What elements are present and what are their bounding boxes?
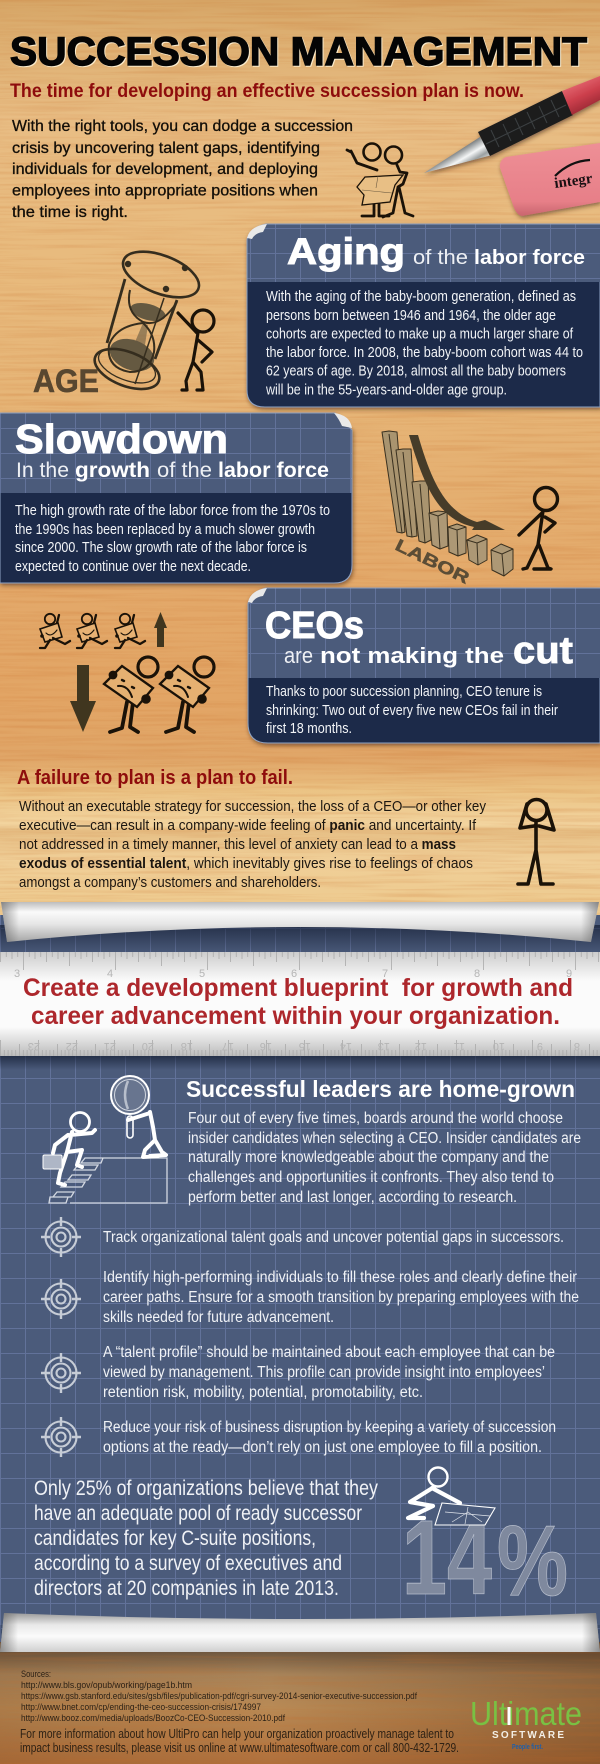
sand <box>105 300 167 377</box>
text block: failure to plan <box>19 799 487 891</box>
intro text: employees into appropriate positions when <box>12 182 318 200</box>
bullet text: talent profile: A “talent profile” should be maintained about each employee that can be <box>103 1344 555 1361</box>
figure with magnifier <box>111 1076 166 1157</box>
text block: failure to plan: exodus of essential talent, which inevitably gives rise to feelings of chaos <box>19 856 473 872</box>
icon: target 3 <box>41 1353 81 1393</box>
footer call to action <box>20 1727 459 1755</box>
ruler with heading <box>0 952 600 1056</box>
stat: 14 percent with figure <box>402 1468 568 1617</box>
heading: slowdown: of the <box>157 458 212 482</box>
body text: aging <box>265 289 583 398</box>
sources: http://www.bls.gov/opub/working/page1b.htm <box>21 1680 192 1691</box>
heading: a failure to plan: A failure to plan is a plan to fail. <box>17 767 293 789</box>
text block: failure to plan: not addressed in a timely manner, this level of anxiety can lead to a mass <box>19 837 456 853</box>
panel: ceos not making the cut <box>248 588 600 743</box>
text block: only 25 percent <box>34 1476 378 1600</box>
logo: ultimate software: SOFTWARE <box>492 1730 564 1741</box>
arrow: up <box>154 612 167 647</box>
intro text <box>12 118 353 221</box>
bullet text: reduce risk <box>103 1419 556 1456</box>
intro text: crisis by uncovering talent gaps, identifying <box>12 140 320 157</box>
heading: ceos: not making the <box>320 643 504 668</box>
icon: worried figure <box>518 800 554 884</box>
ruler numbers: top: 5 <box>199 968 205 980</box>
climber <box>43 1112 95 1185</box>
intro text: With the right tools, you can dodge a succession <box>12 118 353 135</box>
icon: target 1 <box>41 1217 81 1257</box>
ruler numbers: bottom inverted: 8 <box>574 1040 580 1052</box>
icon: eraser: integr <box>553 171 594 192</box>
body text: aging: will be in the 55-years-and-older age group. <box>265 382 507 398</box>
body text: slowdown: since 2000. The slow growth rate of the labor force is <box>15 540 307 556</box>
text block: successful leaders: challenges and opportunities it confronts. They also tend to <box>188 1169 554 1186</box>
heading: aging: labor force <box>474 246 585 269</box>
body text: aging: persons born between 1946 and 1964, the older age <box>266 308 556 324</box>
icon: two figures reading a map <box>347 144 413 217</box>
bullet text: talent profile: retention risk, mobility, potential, promotability, etc. <box>103 1384 423 1401</box>
text block: failure to plan: executive—can result in a company-wide feeling of panic and uncertainty. If <box>19 818 477 834</box>
icon: mechanical pencil <box>424 76 600 173</box>
bullet text: identify individuals <box>103 1269 579 1326</box>
paper curl: bottom <box>0 1613 600 1652</box>
arrow: down <box>70 665 96 732</box>
heading: slowdown: Slowdown <box>15 416 228 462</box>
text block: failure to plan: amongst a company’s customers and shareholders. <box>19 875 321 891</box>
heading: ceos: are <box>284 643 313 668</box>
sources: http://www.bnet.com/cp/ending-the-ceo-succession-crisis/174997 <box>21 1702 261 1713</box>
body text: slowdown: The high growth rate of the labor force from the 1970s to <box>15 503 330 519</box>
ruler numbers: bottom inverted: 23 <box>28 1040 40 1052</box>
stat: 14 percent with figure: 14 <box>402 1499 492 1617</box>
ruler numbers: top: 7 <box>382 968 388 980</box>
logo: ultimate software: People first. <box>512 1744 543 1751</box>
icon: hourglass with figure <box>89 242 214 397</box>
figure reading map <box>408 1468 495 1525</box>
icon: target 4 <box>41 1417 81 1457</box>
body text: ceos: first 18 months. <box>266 721 352 737</box>
figure pointing <box>519 488 558 569</box>
ruler numbers: top <box>14 968 572 980</box>
ruler numbers: bottom inverted: 11 <box>454 1040 465 1052</box>
fold: ceos panel corner <box>248 588 267 603</box>
heading: slowdown: labor force <box>218 458 329 482</box>
icon: target 2 <box>41 1279 81 1319</box>
heading: aging <box>287 231 585 272</box>
ruler numbers: bottom inverted: 9 <box>537 1040 543 1052</box>
ruler numbers: bottom inverted: 10 <box>493 1040 505 1052</box>
body text: slowdown <box>15 503 330 575</box>
heading: ceos: cut <box>513 630 573 672</box>
heading: slowdown: In the <box>16 458 69 482</box>
bullet text: reduce risk: Reduce your risk of business disruption by keeping a variety of succession <box>103 1419 556 1436</box>
panel header: aging <box>248 224 600 282</box>
intro text: the time is right. <box>12 204 128 221</box>
icon: three running happy figures <box>40 614 145 648</box>
logo: ultimate software <box>470 1695 582 1751</box>
stairs and platform <box>49 1158 167 1203</box>
ruler numbers: bottom inverted: 22 <box>66 1040 78 1052</box>
main title: SUCCESSION MANAGEMENT <box>10 30 587 74</box>
ruler numbers: top: 3 <box>14 968 20 980</box>
body text: slowdown: expected to continue over the next decade. <box>15 559 251 575</box>
ruler heading: career advancement within your organization. <box>31 1002 560 1030</box>
ruler heading: Create a development blueprint for growth and <box>23 974 573 1002</box>
arrow: decline <box>409 435 505 530</box>
logo: ultimate software: Ultimate <box>470 1695 582 1732</box>
sources <box>21 1669 417 1724</box>
heading: slowdown <box>15 416 329 482</box>
panel: aging of the labor force <box>247 224 600 407</box>
ruler numbers: bottom inverted <box>28 1040 580 1052</box>
panel header: slowdown <box>0 414 352 493</box>
label: labor: LABOR <box>392 536 472 588</box>
bullet text: talent profile: viewed by management. This profile can provide insight into employees’ <box>103 1364 545 1381</box>
ruler numbers: top: 9 <box>566 968 572 980</box>
ruler numbers: bottom inverted: 13 <box>378 1040 390 1052</box>
footer call to action: impact business results, please visit us online at www.ultimatesoftware.com or call 800-432-1729. <box>20 1741 459 1755</box>
text block: only 25 percent: candidates for key C-suite positions, <box>34 1526 316 1550</box>
body text: slowdown: the 1990s has been replaced by a much slower growth <box>15 522 315 538</box>
ruler heading <box>23 974 573 1030</box>
bullet text: talent profile <box>103 1344 555 1401</box>
ruler numbers: top: 6 <box>291 968 297 980</box>
bullet text: identify individuals: skills needed for future advancement. <box>103 1309 334 1326</box>
ruler numbers: bottom inverted: 21 <box>104 1040 116 1052</box>
heading: ceos <box>265 605 573 672</box>
sources: http://www.booz.com/media/uploads/BoozCo-CEO-Succession-2010.pdf <box>21 1713 285 1724</box>
ruler numbers: bottom inverted: 15 <box>299 1040 311 1052</box>
paper curl: top <box>1 902 599 942</box>
ruler numbers: top: 8 <box>474 968 480 980</box>
text block: only 25 percent: directors at 20 companies in late 2013. <box>34 1576 339 1600</box>
text block: failure to plan: Without an executable strategy for succession, the loss of a CEO—or other key <box>19 799 487 815</box>
body text: ceos: Thanks to poor succession planning, CEO tenure is <box>266 684 542 700</box>
text block: only 25 percent: Only 25% of organizations believe that they <box>34 1476 378 1500</box>
text block: successful leaders <box>188 1110 581 1206</box>
bullet text: reduce risk: options at the ready—don’t rely on just one employee to fill a position. <box>103 1439 542 1456</box>
icon: climbing stairs with magnifier <box>43 1076 167 1203</box>
panel: slowdown in labor force growth <box>0 413 352 583</box>
intro text: individuals for development, and deploying <box>12 161 318 178</box>
subtitle: The time for developing an effective succession plan is now. <box>10 80 524 102</box>
text block: successful leaders: naturally more knowledgeable about the company and the <box>188 1149 549 1166</box>
heading: aging: Aging <box>287 231 405 272</box>
text block: only 25 percent: have an adequate pool of ready successor <box>34 1501 362 1525</box>
text block: successful leaders: perform better and last longer, according to research. <box>188 1189 517 1206</box>
ruler numbers: bottom inverted: 14 <box>340 1040 352 1052</box>
footer call to action: For more information about how UltiPro can help your organization proactively manage talent to <box>20 1727 454 1741</box>
heading: successful leaders: Successful leaders are home-grown <box>186 1076 575 1102</box>
ruler numbers: top: 4 <box>107 968 113 980</box>
icon: eraser <box>500 143 600 216</box>
ruler numbers: bottom inverted: 16 <box>260 1040 272 1052</box>
ruler numbers: bottom inverted: 17 <box>222 1040 234 1052</box>
panel header: ceos <box>248 588 600 678</box>
stat: 14 percent with figure: % <box>497 1505 568 1617</box>
heading: slowdown: growth <box>75 458 150 482</box>
ruler numbers: bottom inverted: 20 <box>142 1040 154 1052</box>
bars <box>382 431 513 576</box>
bullet text: track goals: Track organizational talent goals and uncover potential gaps in successors. <box>103 1229 564 1246</box>
body text: ceos <box>266 684 558 737</box>
fold: aging panel corner <box>247 224 267 239</box>
heading: aging: of the <box>413 246 468 269</box>
text block: successful leaders: Four out of every five times, boards around the world choose <box>188 1110 563 1127</box>
ruler numbers: bottom inverted: 18 <box>181 1040 193 1052</box>
text block: only 25 percent: according to a survey of executives and <box>34 1551 342 1575</box>
sources: Sources: <box>21 1669 51 1680</box>
fold: slowdown panel corner <box>334 413 352 428</box>
chart: declining labor bars with figure <box>382 431 558 588</box>
blueprint background <box>0 915 600 1642</box>
icon: two sad figures <box>104 657 214 732</box>
ruler numbers: bottom inverted: 12 <box>415 1040 427 1052</box>
sources: https://www.gsb.stanford.edu/sites/gsb/files/publication-pdf/cgri-survey-2014-senior-executive-succession.pdf <box>21 1691 417 1702</box>
heading: ceos: CEOs <box>265 605 364 647</box>
label: age: AGE <box>33 363 99 399</box>
